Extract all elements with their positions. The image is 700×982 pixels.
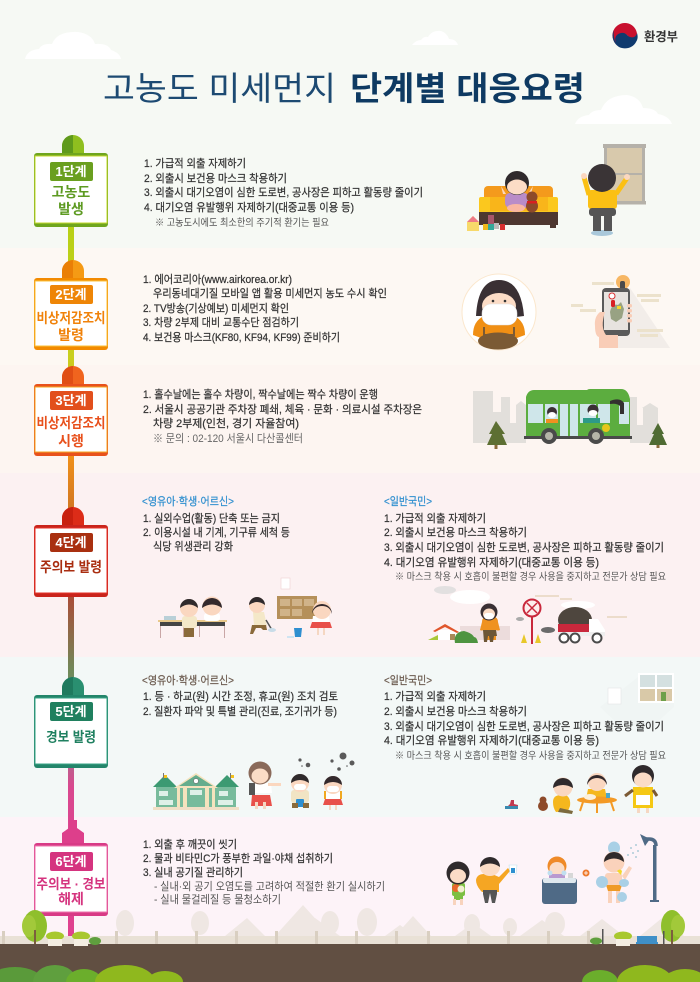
bushes foreground	[0, 965, 700, 982]
text: step 4 vulnerable groups: 식당 위생관리 강화	[153, 540, 233, 553]
text: step 4 general public: 1. 가급적 외출 자제하기	[384, 511, 486, 525]
text: step 5 vulnerable groups	[142, 674, 338, 718]
illustration: children with fruit and water	[446, 857, 517, 905]
illustration: children playing indoors with teacher	[505, 765, 657, 814]
text: step 6 actions: 2. 물과 비타민C가 풍부한 과일·야채 섭취하기	[143, 851, 333, 865]
clouds	[25, 31, 672, 124]
text: step 5 general public: 2. 외출시 보건용 마스크 착용하기	[384, 704, 527, 718]
sign: step 3: 3단계	[55, 393, 87, 408]
sign: step 3: 비상저감조치	[36, 415, 106, 431]
sign: step 2	[34, 260, 108, 350]
text: step 3 actions: 1. 홀수날에는 홀수 차량이, 짝수날에는 짝수 차량이 운행	[143, 388, 378, 401]
text: step 4 vulnerable groups: 1. 실외수업(활동) 단축 또는 금지	[143, 511, 280, 525]
illustration: person closing window	[581, 144, 646, 236]
logo: Ministry of Environment	[612, 23, 678, 48]
sign: step 5: 5단계	[55, 704, 87, 719]
sign: step 4	[34, 507, 108, 597]
ground	[0, 944, 700, 982]
text: step 3 actions	[143, 388, 422, 445]
trees and planters, left	[22, 910, 101, 946]
text: step 4 vulnerable groups	[142, 495, 290, 553]
sign: step 1: 고농도	[52, 184, 90, 200]
logo: Ministry of Environment: 환경부	[644, 30, 678, 44]
text: step 6 actions: - 실내·외 공기 오염도를 고려하여 적절한 환기 실시하기	[154, 879, 385, 893]
text: step 3 actions: ※ 문의 : 02-120 서울시 다산콜센터	[153, 432, 303, 445]
sign: step 2: 비상저감조치	[36, 310, 106, 326]
background hills and fence	[0, 905, 700, 944]
icon: plus sign	[582, 870, 590, 876]
sign: step 4: 주의보 발령	[40, 559, 102, 575]
sign: step 5	[34, 677, 108, 768]
text: step 4 general public: 3. 외출시 대기오염이 심한 도로변, 공사장은 피하고 활동량 줄이기	[384, 540, 664, 554]
text: step 5 general public: 4. 대기오염 유발행위 자제하기(대중교통 이용 등)	[384, 733, 599, 747]
illustration: washing face at sink	[542, 856, 577, 904]
sign: step 1: 1단계	[55, 164, 87, 179]
illustration: teacher and masked children with dust	[248, 752, 354, 810]
sign: step 4: 4단계	[55, 535, 87, 550]
text: step 2 actions: 2. TV방송(기상예보) 미세먼지 확인	[143, 302, 289, 315]
illustration: pollution roadside scene	[428, 586, 627, 644]
text: step 5 general public: ※ 마스크 착용 시 호흡이 불편할 경우 사용을 중지하고 전문가 상담 필요	[395, 749, 666, 762]
sign: step 3: 시행	[58, 433, 84, 449]
text: step 2 actions: 우리동네대기질 모바일 앱 활용 미세먼지 농도 수시 확인	[153, 286, 387, 300]
sign: step 5: 경보 발령	[46, 729, 96, 745]
text: step 5 general public: 1. 가급적 외출 자제하기	[384, 689, 486, 703]
sign: step 2: 발령	[58, 327, 84, 343]
text: step 4 general public	[384, 494, 666, 583]
poles connecting the signs	[68, 227, 74, 944]
illustration: school building	[153, 773, 239, 810]
text: step 4 vulnerable groups: 2. 이용시설 내 기계, 기구류 세척 등	[143, 526, 290, 539]
text: step 2 actions: 4. 보건용 마스크(KF80, KF94, KF99) 준비하기	[143, 330, 340, 344]
text: step 6 actions: 3. 실내 공기질 관리하기	[143, 865, 243, 879]
illustration: school children cleaning	[158, 578, 332, 638]
text: step 6 actions: - 실내 물걸레질 등 물청소하기	[154, 892, 281, 906]
text: step 1 actions: 4. 대기오염 유발행위 자제하기(대중교통 이용 등)	[144, 200, 354, 214]
text: step 2 actions: 3. 차량 2부제 대비 교통수단 점검하기	[143, 315, 299, 329]
text: step 5 vulnerable groups: <영유아·학생·어르신>	[142, 674, 234, 687]
text: step 5 vulnerable groups: 1. 등 · 하교(원) 시간 조정, 휴교(원) 조치 검토	[143, 689, 338, 703]
sign: step 2: 2단계	[55, 287, 87, 302]
text: step 6 actions: 1. 외출 후 깨끗이 씻기	[143, 838, 237, 851]
title emphasis: 단계별 대응요령	[350, 70, 585, 107]
text: step 5 general public: 3. 외출시 대기오염이 심한 도로변, 공사장은 피하고 활동량 줄이기	[384, 719, 664, 733]
text: step 4 general public: 4. 대기오염 유발행위 자제하기(대중교통 이용 등)	[384, 555, 599, 569]
sign: step 1	[34, 135, 108, 227]
text: step 3 actions: 2. 서울시 공공기관 주차장 폐쇄, 체육 · 문화 · 의료시설 주차장은	[143, 403, 422, 416]
sign: step 1: 발생	[58, 201, 84, 217]
text: step 2 actions: 1. 에어코리아(www.airkorea.or.kr)	[143, 273, 292, 286]
text: step 1 actions: 1. 가급적 외출 자제하기	[144, 156, 246, 170]
text: step 1 actions	[144, 156, 423, 229]
text: step 5 general public	[384, 673, 666, 762]
sign: step 6: 6단계	[55, 854, 87, 869]
text: step 4 general public: 2. 외출시 보건용 마스크 착용하기	[384, 525, 527, 539]
text: step 1 actions: 2. 외출시 보건용 마스크 착용하기	[144, 171, 287, 185]
sign: step 6	[34, 820, 108, 916]
trees, planter and bench, right	[590, 910, 685, 946]
text: step 3 actions: 차량 2부제(인천, 경기 자율참여)	[153, 416, 299, 430]
illustration: window and note on wall	[600, 673, 674, 725]
illustration: child on sofa with toys	[467, 171, 558, 231]
text: step 1 actions: 3. 외출시 대기오염이 심한 도로변, 공사장은 피하고 활동량 줄이기	[144, 185, 423, 199]
title: 고농도 미세먼지	[103, 70, 336, 107]
text: step 4 general public: ※ 마스크 착용 시 호흡이 불편할 경우 사용을 중지하고 전문가 상담 필요	[395, 570, 666, 583]
text: step 5 vulnerable groups: 2. 질환자 파악 및 특별 관리(진료, 조기귀가 등)	[143, 705, 337, 718]
text: step 1 actions: ※ 고농도시에도 최소한의 주기적 환기는 필요	[155, 217, 329, 229]
sign: step 6: 주의보 · 경보	[36, 876, 106, 892]
sign: step 3	[34, 366, 108, 456]
text: step 2 actions	[143, 273, 387, 344]
illustration: green bus in city with trees	[473, 389, 667, 449]
text: step 6 actions	[143, 838, 385, 906]
sign: step 6: 해제	[58, 891, 84, 907]
text: step 5 general public: <일반국민>	[384, 673, 432, 687]
illustration: hand holding phone with map	[571, 275, 670, 348]
text: step 4 general public: <일반국민>	[384, 494, 432, 508]
illustration: child showering	[596, 834, 659, 903]
text: step 4 vulnerable groups: <영유아·학생·어르신>	[142, 495, 234, 508]
illustration: masked woman in circle	[462, 274, 536, 350]
